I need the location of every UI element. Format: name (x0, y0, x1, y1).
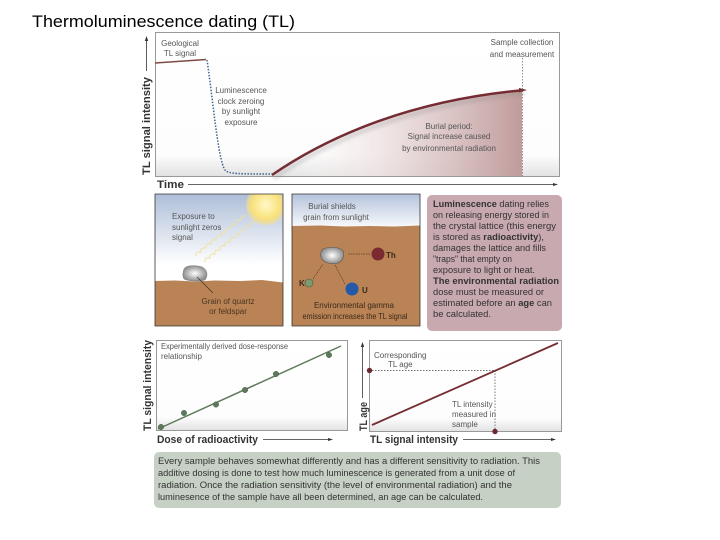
y axis: dose chart: TL signal intensity (142, 339, 154, 431)
burial period shaded area (272, 90, 522, 176)
panel: luminescence explanation: dose must be measured or (433, 287, 544, 297)
panel: sample sensitivity text: luminesence of the sample have all been determined, an age can be calculated. (158, 492, 483, 502)
panel: sunlight exposure (155, 185, 286, 326)
label: clock zeroing: clock zeroing (218, 97, 264, 106)
age point (367, 368, 372, 373)
chart caption (161, 342, 289, 361)
exposure label: signal (172, 233, 193, 242)
label: sample collection: and measurement (490, 50, 555, 59)
panel: dose-response chart (156, 340, 348, 430)
label: corresponding age (374, 351, 426, 369)
x axis: dose of radioactivity: Dose of radioactivity (157, 434, 259, 446)
measurement dotted line (522, 58, 524, 176)
dashed guides (372, 370, 495, 430)
label: TL signal: TL signal (164, 49, 196, 58)
label: geological: Geological (161, 39, 199, 48)
panel: sample sensitivity text (154, 452, 561, 508)
label: sample collection: Sample collection (491, 38, 553, 47)
panel: sample sensitivity text: Every sample behaves somewhat differently and has a different sensitivity to radiation. This (158, 456, 541, 466)
panel: TL age chart (367, 340, 562, 434)
chart caption: Experimentally derived dose-response (161, 342, 289, 351)
label: corresponding age: TL age (388, 360, 413, 369)
sunlight rays (196, 216, 255, 262)
U element: U (362, 286, 368, 295)
label: sample collection (490, 38, 555, 59)
exposure label: Exposure to (172, 212, 215, 221)
panel: luminescence explanation: on releasing energy stored in (433, 210, 549, 220)
title: Thermoluminescence dating (TL) (32, 13, 295, 31)
panel: sample sensitivity text: radiation. Once the radiation sensitivity (the level of environmental radiation) and the (158, 480, 512, 490)
burial label: grain from sunlight (303, 213, 370, 222)
panel: luminescence explanation: "traps" that empty on (433, 254, 512, 264)
panel: luminescence explanation: The environmental radiation (433, 276, 559, 286)
panel: luminescence explanation: is stored as radioactivity), (433, 232, 544, 242)
x axis: time: Time (157, 179, 184, 191)
label: clock zeroing (215, 86, 267, 127)
intensity point (492, 429, 498, 434)
panel: luminescence explanation: damages the lattice and fills (433, 243, 546, 253)
Th element: Th (386, 251, 396, 260)
gamma label: Environmental gamma (314, 301, 395, 310)
zeroing dotted curve (207, 60, 272, 174)
burial signal curve (272, 88, 527, 178)
icon: sun (246, 194, 283, 225)
label: burial period: Signal increase caused (408, 132, 490, 141)
panel: sample sensitivity text: additive dosing is done to test how much luminescence is generated from a unit dose of (158, 468, 516, 478)
label: TL intensity measured: TL intensity (452, 400, 493, 409)
gamma arrows (313, 254, 370, 284)
K element: K (299, 279, 305, 288)
burial label: Burial shields (308, 202, 356, 211)
exposure label: sunlight zeros (172, 223, 221, 232)
age line (372, 343, 558, 425)
panel: luminescence explanation: the crystal lattice (this energy (433, 221, 557, 231)
y axis: TL age: TL age (358, 402, 370, 431)
label: TL intensity measured (452, 400, 496, 429)
gamma label (302, 301, 408, 321)
label: corresponding age: Corresponding (374, 351, 426, 360)
label: burial period (402, 122, 496, 153)
grain of quartz (183, 266, 207, 281)
label: clock zeroing: Luminescence (215, 86, 267, 95)
grain label: or feldspar (209, 307, 247, 316)
x axis: time (157, 179, 558, 191)
gamma label: emission increases the TL signal (302, 312, 408, 321)
ground (292, 226, 420, 326)
grain label (202, 297, 254, 316)
x axis: dose of radioactivity (157, 434, 333, 446)
data points (158, 352, 332, 430)
label: burial period: by environmental radiation (402, 144, 496, 153)
grain leader (197, 277, 213, 293)
panel: TL signal over time chart (155, 32, 560, 178)
label: clock zeroing: exposure (225, 118, 258, 127)
burial label (303, 202, 370, 222)
chart caption: relationship (161, 352, 202, 361)
panel: luminescence explanation (427, 195, 562, 331)
panel: luminescence explanation: exposure to light or heat. (433, 265, 535, 275)
x axis: TL signal intensity (370, 434, 556, 446)
panel: burial shields grain (292, 194, 420, 326)
exposure label (172, 212, 221, 242)
ground (155, 280, 283, 326)
label: burial period: Burial period: (425, 122, 473, 131)
trend line (158, 346, 341, 429)
panel: luminescence explanation: Luminescence dating relies (433, 199, 550, 209)
label: TL intensity measured: measured in (452, 410, 496, 419)
y axis: TL signal intensity: TL signal intensity (141, 76, 153, 175)
label: TL intensity measured: sample (452, 420, 478, 429)
x axis: TL signal intensity: TL signal intensity (370, 434, 459, 446)
panel: luminescence explanation: be calculated. (433, 309, 491, 319)
buried grain (321, 247, 344, 264)
label: clock zeroing: by sunlight (222, 107, 261, 116)
geological TL signal line (155, 60, 206, 63)
panel: luminescence explanation: estimated before an age can (433, 298, 552, 308)
y axis: TL signal intensity (141, 36, 153, 175)
grain label: Grain of quartz (202, 297, 254, 306)
y axis: TL age (358, 342, 370, 431)
